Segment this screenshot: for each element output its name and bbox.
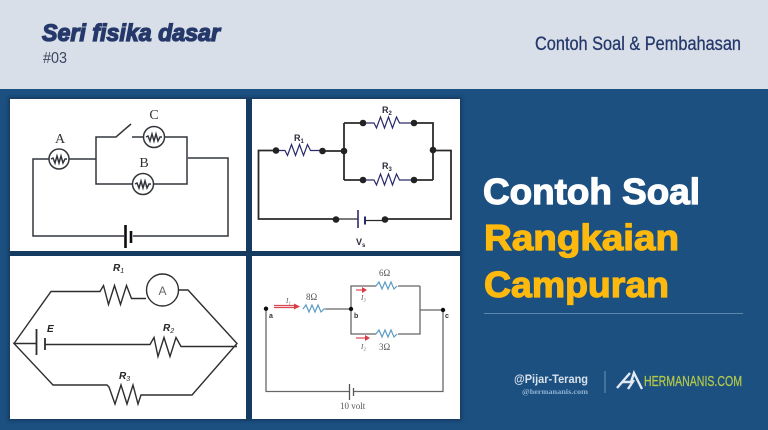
header band <box>0 0 768 89</box>
labels R and E: R <box>119 371 126 382</box>
resistor labels: 2 <box>388 111 392 117</box>
resistor labels: R <box>294 133 300 143</box>
panel: circuit 8 6 3 ohm 10 volt <box>252 256 460 419</box>
resistor labels: V <box>356 237 362 247</box>
lamp labels: C <box>149 108 159 123</box>
resistor labels: R <box>382 105 388 115</box>
resistor labels: 1 <box>300 139 304 145</box>
title line white: Contoh Soal <box>483 171 700 212</box>
lamp labels <box>55 108 159 171</box>
main title <box>483 171 700 305</box>
resistor labels: 3 <box>388 167 392 173</box>
icon: mountain logo <box>617 373 642 389</box>
series number: #03 <box>43 50 67 67</box>
labels R and E <box>47 263 174 383</box>
labels R and E: R <box>113 263 120 274</box>
title line yellow 2: Campuran <box>484 264 669 305</box>
lamp labels: A <box>55 132 66 147</box>
component labels: 8Ω <box>306 292 318 302</box>
social handle <box>514 372 589 396</box>
node labels: a <box>269 313 273 320</box>
node labels: c <box>445 313 449 320</box>
node labels <box>269 313 449 320</box>
panel: circuit R1 ammeter R2 R3 <box>10 256 246 419</box>
component labels <box>285 268 390 411</box>
component labels: I₁ <box>285 297 291 305</box>
labels R and E: 2 <box>169 328 174 335</box>
labels R and E: 1 <box>120 268 124 275</box>
resistor labels: s <box>362 243 366 249</box>
social handle: @Pijar-Terang <box>514 372 588 386</box>
title line yellow 1: Rangkaian <box>484 217 679 258</box>
labels R and E: R <box>163 323 170 334</box>
header right label: Contoh Soal & Pembahasan <box>535 34 741 55</box>
series title: Seri fisika dasar <box>42 20 222 47</box>
brand logo <box>617 373 742 390</box>
node labels: b <box>354 313 358 320</box>
component labels: I₃ <box>360 294 366 302</box>
lamp labels: B <box>139 156 149 171</box>
resistor labels: R <box>382 161 388 171</box>
component labels: 10 volt <box>340 401 366 411</box>
labels R and E: E <box>47 324 54 335</box>
component labels: 3Ω <box>379 342 390 352</box>
ammeter letter: A <box>158 284 167 298</box>
labels R and E: 3 <box>126 376 130 383</box>
panel: circuit R1 R2 R3 Vs <box>252 99 460 251</box>
panel: circuit lamps A B C <box>10 99 246 251</box>
component labels: 6Ω <box>379 268 390 278</box>
component labels: I₂ <box>360 343 366 351</box>
resistor labels <box>294 105 392 249</box>
social handle: @hermananis.com <box>522 387 589 396</box>
